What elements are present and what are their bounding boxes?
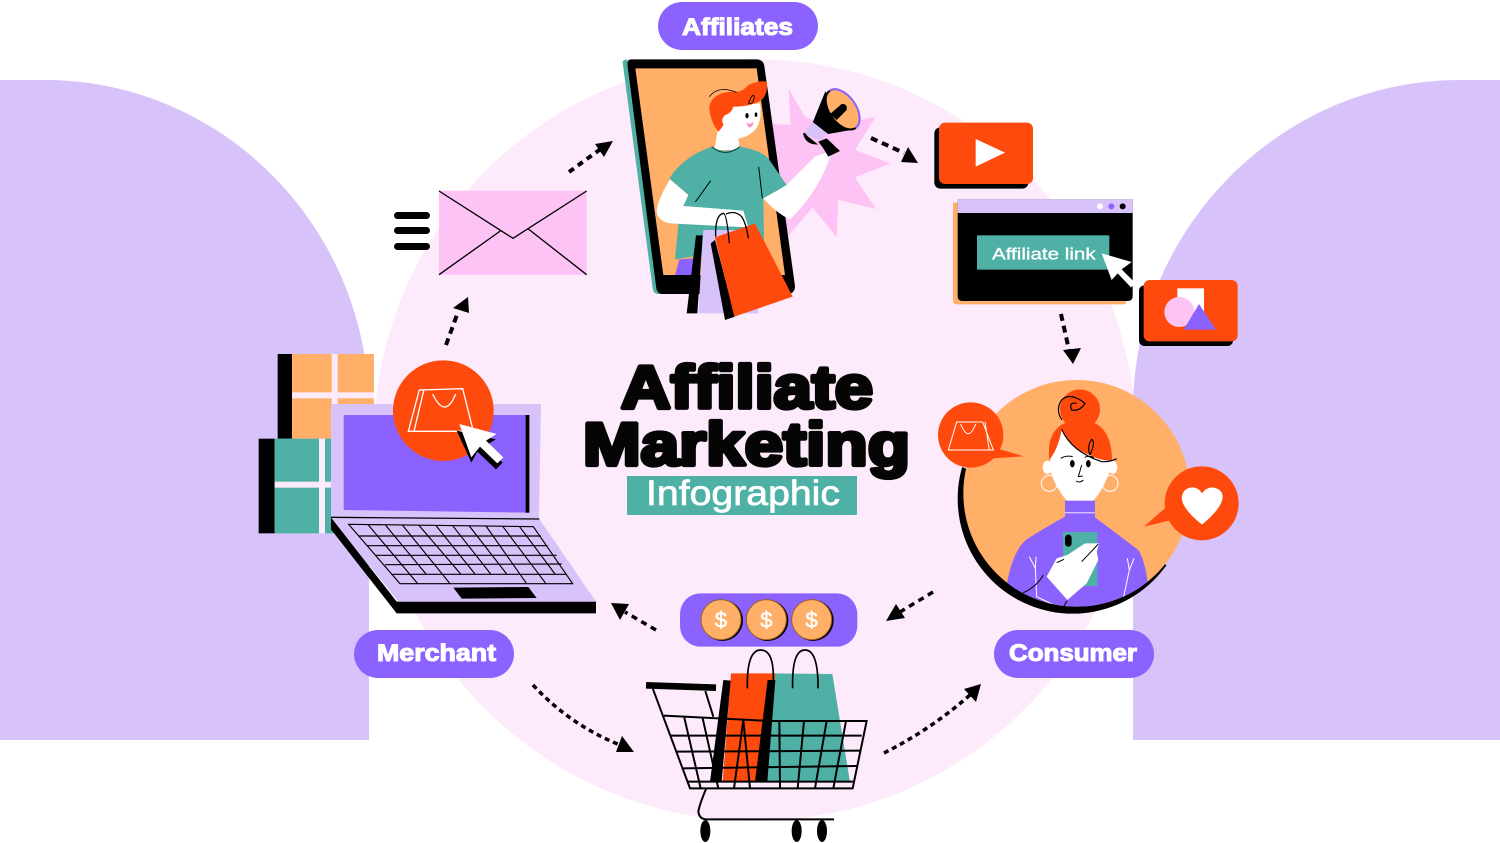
consumer portrait [938, 380, 1239, 620]
orange parcel [278, 354, 374, 439]
subtitle: Infographic: Infographic [646, 474, 840, 513]
browser window [953, 199, 1136, 304]
lavender shopping bag [687, 230, 758, 313]
left arm [657, 179, 748, 227]
coins pill [680, 593, 857, 647]
arrow: affiliates to video [871, 138, 918, 163]
laptop base [331, 517, 596, 613]
coins: $ [760, 607, 772, 632]
pill: Merchant: Merchant [377, 640, 496, 667]
arrow: coins to merchant [611, 603, 656, 630]
hand [1047, 543, 1099, 600]
email envelope [439, 191, 587, 275]
hair [1049, 389, 1117, 462]
arrow: merchant to cart [533, 685, 634, 752]
neck and head [714, 103, 761, 150]
arrow: cart to consumer [884, 684, 981, 753]
pill: Consumer [994, 630, 1154, 678]
phone [1063, 532, 1097, 586]
title [583, 354, 910, 478]
shirt [669, 147, 787, 259]
pill: Merchant [354, 630, 514, 678]
pill: Affiliates [658, 2, 818, 50]
laptop screen [331, 404, 541, 518]
media icon [1139, 280, 1238, 346]
coins: $ [715, 607, 727, 632]
coins: $ [806, 607, 818, 632]
left lavender arch [0, 80, 369, 740]
video, link window and media icons [934, 123, 1238, 346]
arrow: merchant to envelope [446, 297, 469, 345]
face [745, 112, 757, 127]
menu icon [394, 212, 430, 250]
megaphone [803, 83, 867, 157]
affiliate person on phone with megaphone [623, 59, 891, 320]
right lavender arch [1133, 80, 1500, 740]
ear [722, 115, 732, 127]
video player [934, 123, 1033, 189]
pill: Affiliates: Affiliates [682, 14, 793, 41]
arrow: link to consumer [1061, 314, 1081, 364]
arrow: consumer to coins [886, 592, 933, 621]
phone frame [623, 59, 662, 294]
earrings [1041, 475, 1118, 491]
title: Affiliate [621, 354, 873, 421]
title: Marketing [583, 411, 910, 478]
heart speech bubble [1144, 466, 1239, 540]
cursor [457, 424, 503, 469]
right arm [763, 150, 833, 219]
coins [701, 600, 834, 641]
sweater [1007, 500, 1148, 607]
face features [1061, 456, 1094, 482]
wheels [700, 820, 827, 842]
browser window: Affiliate link [992, 244, 1096, 263]
keyboard [349, 524, 573, 584]
merchant laptop and parcels [259, 354, 596, 613]
shopping cart with bags [646, 650, 867, 842]
orange shopping bag [711, 212, 793, 320]
shopping circle badge [393, 360, 494, 461]
arrow: envelope to affiliates [569, 141, 613, 172]
bag speech bubble [938, 402, 1024, 468]
burst [767, 88, 891, 238]
cart frame [646, 685, 867, 819]
orange bag [710, 650, 775, 782]
pill: Consumer: Consumer [1009, 640, 1137, 667]
hair [709, 81, 767, 132]
teal bag [767, 650, 850, 782]
central pink circle [374, 59, 1136, 821]
neck and face [1050, 429, 1112, 501]
teal parcel [259, 439, 335, 533]
purple trousers [675, 258, 695, 275]
